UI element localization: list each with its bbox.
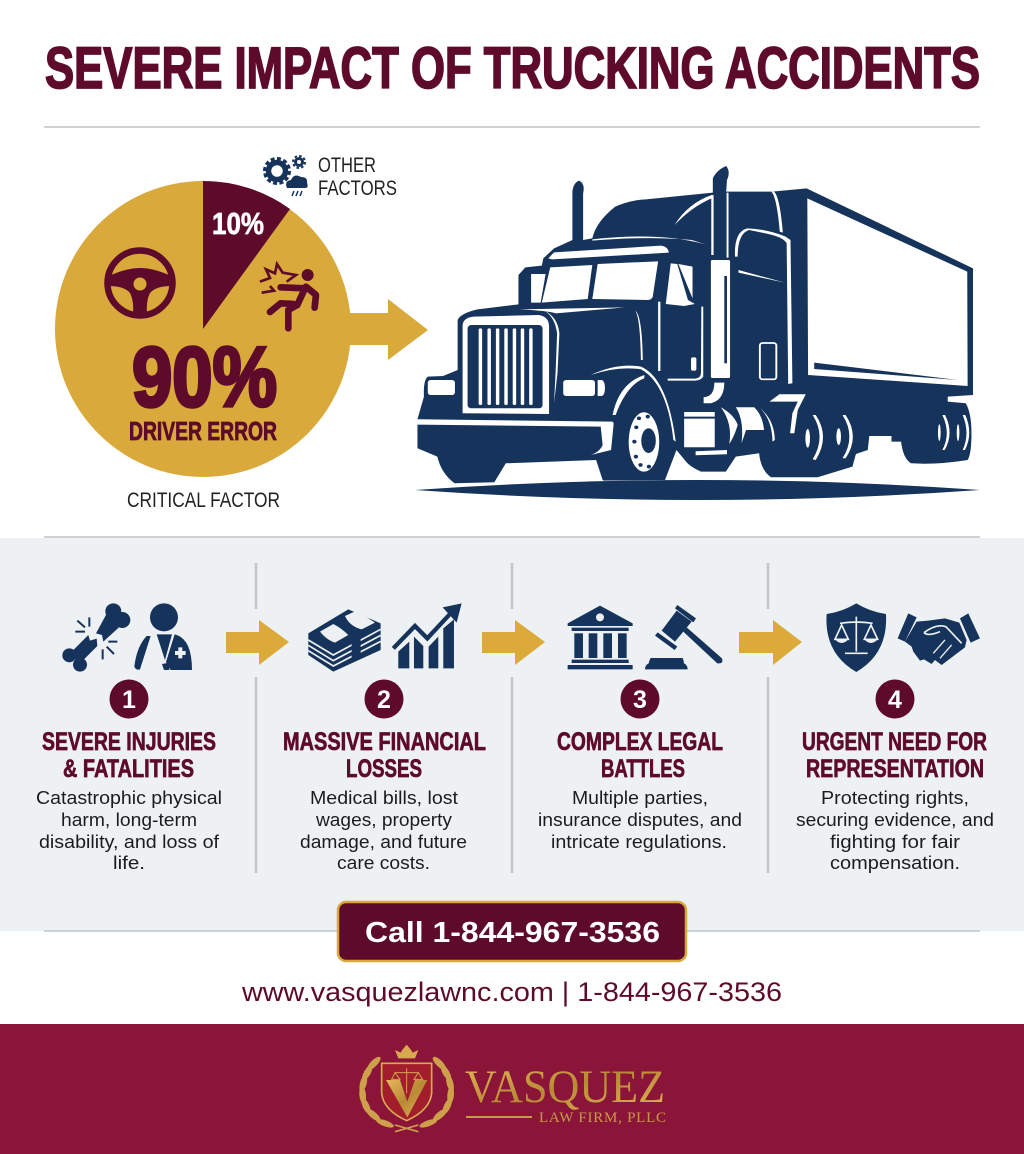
icon: steering wheel	[108, 250, 172, 316]
logo crest	[358, 1045, 455, 1132]
icon: person struck by impact	[260, 264, 316, 328]
front wheel	[629, 412, 659, 472]
trailer side panel	[807, 198, 968, 386]
headlights and body lines	[417, 192, 792, 455]
logo wordmark: VASQUEZ	[465, 1061, 665, 1113]
arrow: pie to truck	[349, 299, 428, 360]
heading: SEVERE INJURIES	[42, 728, 216, 756]
exhaust stack	[704, 193, 730, 403]
call button: Call 1-844-967-3536	[365, 917, 660, 949]
step 4: urgent representation: 4	[888, 686, 902, 714]
arrow: step 2 to 3	[482, 620, 545, 665]
step 2: financial losses: 2	[377, 686, 391, 714]
number badge 4	[876, 680, 914, 718]
trailer stripe	[814, 363, 958, 380]
description: disability, and loss of	[39, 832, 220, 852]
icon: rising chart	[393, 603, 462, 668]
description	[796, 788, 994, 873]
step 3: legal battles: 3	[633, 686, 647, 714]
step 2: financial losses: LOSSES	[346, 755, 422, 783]
step 3: legal battles: BATTLES	[601, 755, 685, 783]
V monogram	[386, 1080, 427, 1117]
icon: handshake	[898, 613, 980, 665]
description: life.	[113, 853, 145, 873]
description: intricate regulations.	[551, 832, 727, 852]
number badge 3	[620, 680, 660, 718]
label: 90%: 90%	[132, 330, 277, 424]
description: securing evidence, and	[796, 810, 994, 830]
pie: 10% other factors slice	[203, 181, 290, 329]
arrow: step 3 to 4	[739, 620, 802, 665]
step 1: severe injuries	[36, 603, 222, 873]
other factors legend: FACTORS	[318, 177, 397, 200]
description: Multiple parties,	[572, 788, 708, 808]
label: 10%: 10%	[212, 207, 264, 241]
pie chart: crash causes	[55, 181, 428, 477]
description: Catastrophic physical	[36, 788, 222, 808]
description: fighting for fair	[830, 832, 960, 852]
laurel right	[419, 1055, 455, 1129]
step 1: severe injuries: & FATALITIES	[63, 755, 194, 783]
description	[300, 788, 467, 873]
call button	[338, 902, 686, 961]
scales	[392, 1068, 423, 1093]
arrow: step 1 to 2	[226, 620, 289, 665]
truck silhouette	[417, 166, 973, 483]
footer band: LAW FIRM, PLLC	[539, 1110, 666, 1126]
icon: injured patient	[134, 603, 192, 670]
description: wages, property	[315, 810, 452, 830]
description: Protecting rights,	[821, 788, 969, 808]
icon: gavel	[645, 605, 722, 669]
step 2: financial losses	[283, 603, 486, 873]
shield	[382, 1063, 432, 1121]
drivetrain and steps	[684, 394, 969, 460]
label: critical factor: CRITICAL FACTOR	[127, 489, 280, 512]
crown	[395, 1045, 418, 1058]
panel: four consequences	[0, 537, 1024, 931]
icon: stack of money	[308, 609, 381, 672]
description: care costs.	[337, 853, 430, 873]
footer band	[0, 1024, 1024, 1154]
icon: shield with scales	[826, 603, 886, 672]
contact line: www.vasquezlawnc.com | 1-844-967-3536	[241, 977, 782, 1007]
description: insurance disputes, and	[538, 810, 742, 830]
truck illustration	[417, 166, 973, 483]
description: Medical bills, lost	[310, 788, 458, 808]
description	[36, 788, 222, 873]
pie: 90% driver error slice	[55, 181, 351, 477]
icon: courthouse	[568, 606, 633, 669]
ground shadow	[415, 480, 980, 500]
hood grille	[463, 315, 549, 414]
heading: MASSIVE FINANCIAL	[283, 728, 486, 756]
step 3: legal battles	[538, 605, 742, 852]
other factors legend	[264, 154, 397, 200]
description: harm, long-term	[61, 810, 197, 830]
number badge 2	[364, 680, 404, 718]
laurel left	[358, 1055, 395, 1129]
label: driver error: DRIVER ERROR	[129, 418, 277, 446]
sleeper window	[760, 343, 776, 379]
number badge 1	[110, 680, 148, 718]
heading: COMPLEX LEGAL	[557, 728, 723, 756]
step 1: severe injuries: 1	[122, 686, 136, 714]
step 4: urgent representation	[796, 603, 994, 873]
label: other factors: OTHER	[318, 154, 376, 177]
icon: broken bone	[62, 603, 130, 672]
description	[538, 788, 742, 852]
icon: gears and rain cloud	[264, 156, 308, 196]
description: compensation.	[830, 853, 960, 873]
windshield and cab windows	[531, 246, 695, 306]
description: damage, and future	[300, 832, 467, 852]
